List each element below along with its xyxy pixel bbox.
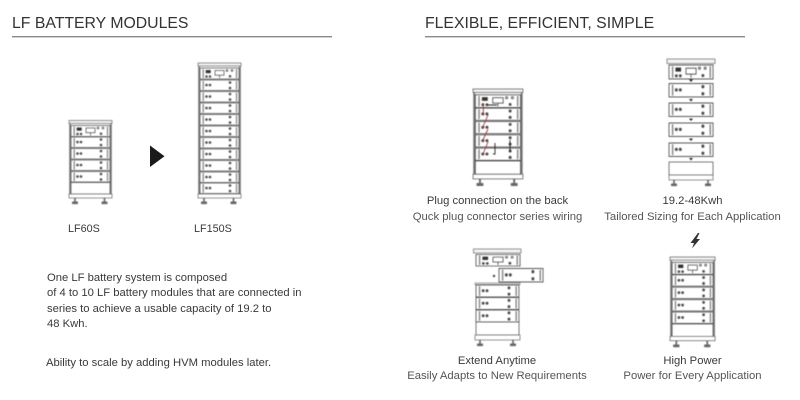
caption: sizing: 19.2-48Kwh (662, 195, 723, 207)
text block: system description: 48 Kwh. (47, 318, 88, 330)
icon: LF150S rack (198, 63, 241, 204)
icon: lightning bolt (690, 233, 700, 248)
text block: system description: One LF battery system is composed (47, 272, 227, 284)
caption: high power (623, 355, 762, 382)
icon: rack high power (670, 257, 715, 347)
caption: plug connection: Quck plug connector series wiring (413, 211, 582, 223)
icon: rack with back wiring (473, 89, 523, 186)
caption: extend anytime (407, 355, 587, 382)
label: LF60S: LF60S (68, 223, 100, 235)
caption: plug connection: Plug connection on the back (427, 195, 569, 207)
text block: system description: of 4 to 10 LF battery modules that are connected in (47, 287, 302, 299)
caption: extend anytime: Easily Adapts to New Requirements (407, 370, 587, 382)
icon: arrow right (150, 146, 164, 167)
text block: system description (47, 272, 302, 330)
label: LF150S: LF150S (194, 223, 232, 235)
caption: sizing: Tailored Sizing for Each Application (604, 211, 781, 223)
text block: scaling note: Ability to scale by adding HVM modules later. (46, 357, 271, 369)
caption: high power: Power for Every Application (623, 370, 762, 382)
text block: system description: series to achieve a usable capacity of 19.2 to (47, 303, 272, 315)
caption: plug connection (413, 195, 582, 223)
caption: sizing (604, 195, 781, 223)
icon: exploded stack (667, 59, 715, 186)
icon: extendable rack (474, 249, 543, 346)
icon: LF60S rack (69, 120, 112, 204)
caption: extend anytime: Extend Anytime (458, 355, 536, 367)
caption: high power: High Power (663, 355, 722, 367)
heading: LF battery modules: LF BATTERY MODULES (12, 15, 188, 32)
heading: flexible, efficient, simple: FLEXIBLE, EFFICIENT, SIMPLE (425, 15, 654, 32)
